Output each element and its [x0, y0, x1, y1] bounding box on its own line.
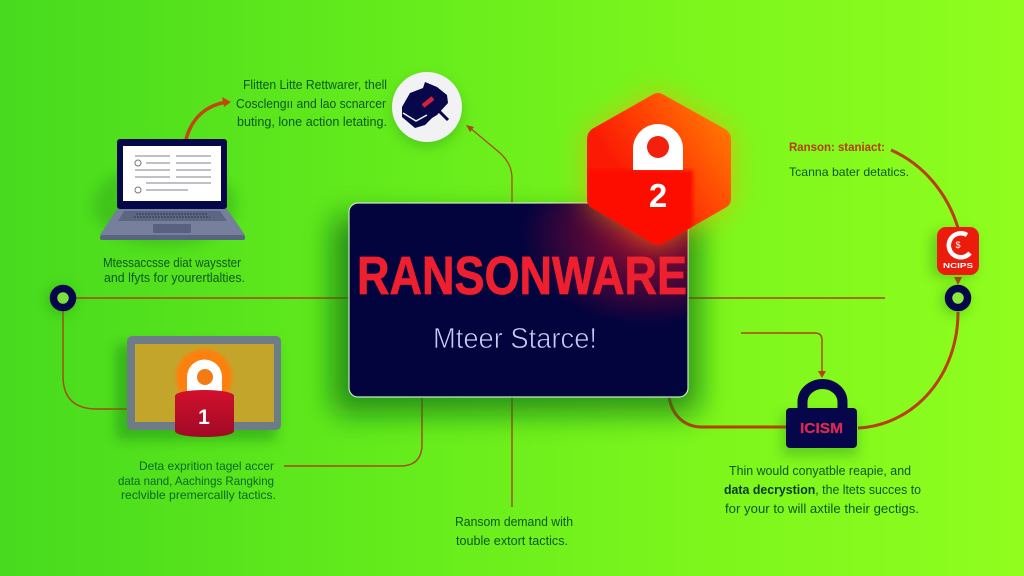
- icon: red payment badge: NCIPS: [943, 263, 973, 270]
- arrowheads: [222, 97, 962, 378]
- icon: locked monitor 1: 1: [198, 406, 210, 429]
- text: top note: Cosclengıı and lao scnarcer: [236, 97, 386, 111]
- text: decryption caption: for your to will axtile their gectigs.: [725, 502, 919, 516]
- text: laptop caption: Mtessaccsse diat waysster: [103, 256, 241, 270]
- icon: red hexagon lock 2: [580, 93, 731, 250]
- text: bottom centre caption: [455, 515, 573, 548]
- panel shadow: [332, 216, 700, 414]
- icon: red payment badge: $: [955, 240, 961, 250]
- text: ransom note top right: [789, 140, 909, 179]
- text: data encryption caption: [118, 459, 276, 502]
- text: ransom note top right: Tcanna bater detatics.: [789, 165, 909, 179]
- subtitle: Mteer Starce!: [433, 323, 597, 355]
- text: data encryption caption: data nand, Aachings Rangking: [118, 474, 274, 488]
- hexagon glow: [587, 92, 731, 246]
- icon: padlock ICISM: [782, 384, 858, 456]
- text: decryption caption: data decrystion, the ltets succes to: [724, 483, 921, 497]
- icon: red payment badge: [931, 227, 979, 278]
- text: top note: Flitten Litte Rettwarer, thell: [243, 78, 387, 92]
- title: RANSONWARE: [357, 246, 687, 306]
- text: data encryption caption: reclvible premercallly tactics.: [121, 488, 276, 502]
- text: bottom centre caption: touble extort tactics.: [456, 534, 568, 548]
- icon: locked monitor 1: [116, 336, 281, 440]
- node: right ring: [941, 287, 969, 315]
- text: decryption caption: Thin would conyatble reapie, and: [729, 464, 911, 478]
- text: decryption caption: [724, 464, 921, 516]
- panel: central ransomware card: [348, 202, 689, 398]
- connector lines: [63, 102, 958, 507]
- icon: laptop: [93, 139, 245, 247]
- text: ransom note top right: Ranson: staniact:: [789, 140, 885, 154]
- text: top note: [236, 78, 387, 129]
- text: laptop caption: [103, 256, 245, 285]
- text: data encryption caption: Deta exprition tagel accer: [139, 459, 274, 473]
- icon: red hexagon lock 2: 2: [649, 177, 667, 214]
- text: top note: buting, lone action letating.: [237, 115, 387, 129]
- text: bottom centre caption: Ransom demand with: [455, 515, 573, 529]
- node: left ring: [47, 286, 75, 314]
- icon: white circle badge: [392, 72, 462, 147]
- text: laptop caption: and lfyts for yourertlalties.: [104, 271, 245, 285]
- icon: padlock ICISM: ICISM: [800, 420, 843, 437]
